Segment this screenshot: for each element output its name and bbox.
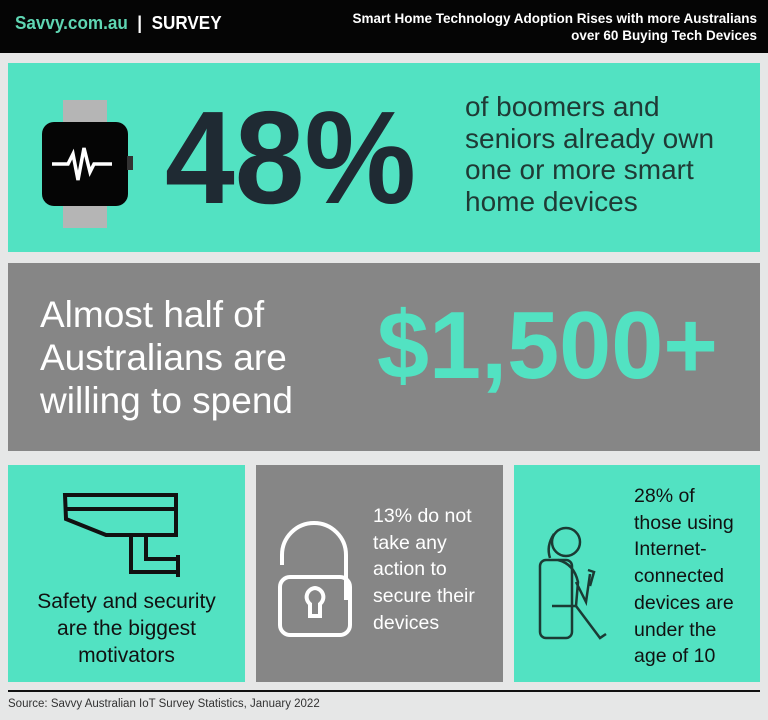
header title: over 60 Buying Tech Devices <box>571 28 757 43</box>
caption: under the <box>634 619 716 641</box>
caption: 28% of <box>634 485 695 507</box>
caption: secure their <box>373 585 475 607</box>
caption: devices are <box>634 592 734 614</box>
caption: 13% do not <box>373 505 472 527</box>
caption: motivators <box>78 644 175 667</box>
caption <box>37 590 216 667</box>
description: home devices <box>465 186 638 216</box>
description: one or more smart <box>465 154 694 185</box>
icon: smartwatch <box>42 100 133 228</box>
caption: age of 10 <box>634 645 715 667</box>
panel: 13% <box>256 465 503 682</box>
caption: take any <box>373 532 447 554</box>
text: Almost half of <box>40 294 264 335</box>
caption <box>634 485 734 667</box>
header bar <box>0 0 768 53</box>
panel: $1,500+ <box>8 263 760 451</box>
text: Australians are <box>40 337 287 378</box>
description: seniors already own <box>465 122 714 154</box>
description <box>465 91 714 216</box>
caption: devices <box>373 612 439 634</box>
source: Source: Savvy Australian IoT Survey Statistics, January 2022 <box>8 698 320 710</box>
icon: open padlock <box>278 521 352 637</box>
brand: Savvy.com.au | SURVEY <box>15 13 222 33</box>
big number 48%: 48% <box>165 84 416 231</box>
big number: $1,500+ <box>377 292 718 399</box>
icon: security camera <box>62 493 180 577</box>
caption: are the biggest <box>57 617 196 640</box>
caption: action to <box>373 558 447 580</box>
panel: 48% <box>8 63 760 252</box>
icon: child with phone <box>538 526 607 640</box>
caption: Safety and security <box>37 590 216 613</box>
caption <box>373 505 475 634</box>
text: willing to spend <box>40 380 293 421</box>
panel: 28% <box>514 465 760 682</box>
caption: those using <box>634 512 734 534</box>
description: of boomers and <box>465 91 660 122</box>
header title: Smart Home Technology Adoption Rises with more Australians <box>352 11 757 26</box>
caption: Internet- <box>634 538 707 560</box>
caption: connected <box>634 565 724 587</box>
header title <box>352 11 757 43</box>
text <box>40 294 293 421</box>
panel: safety <box>8 465 245 682</box>
